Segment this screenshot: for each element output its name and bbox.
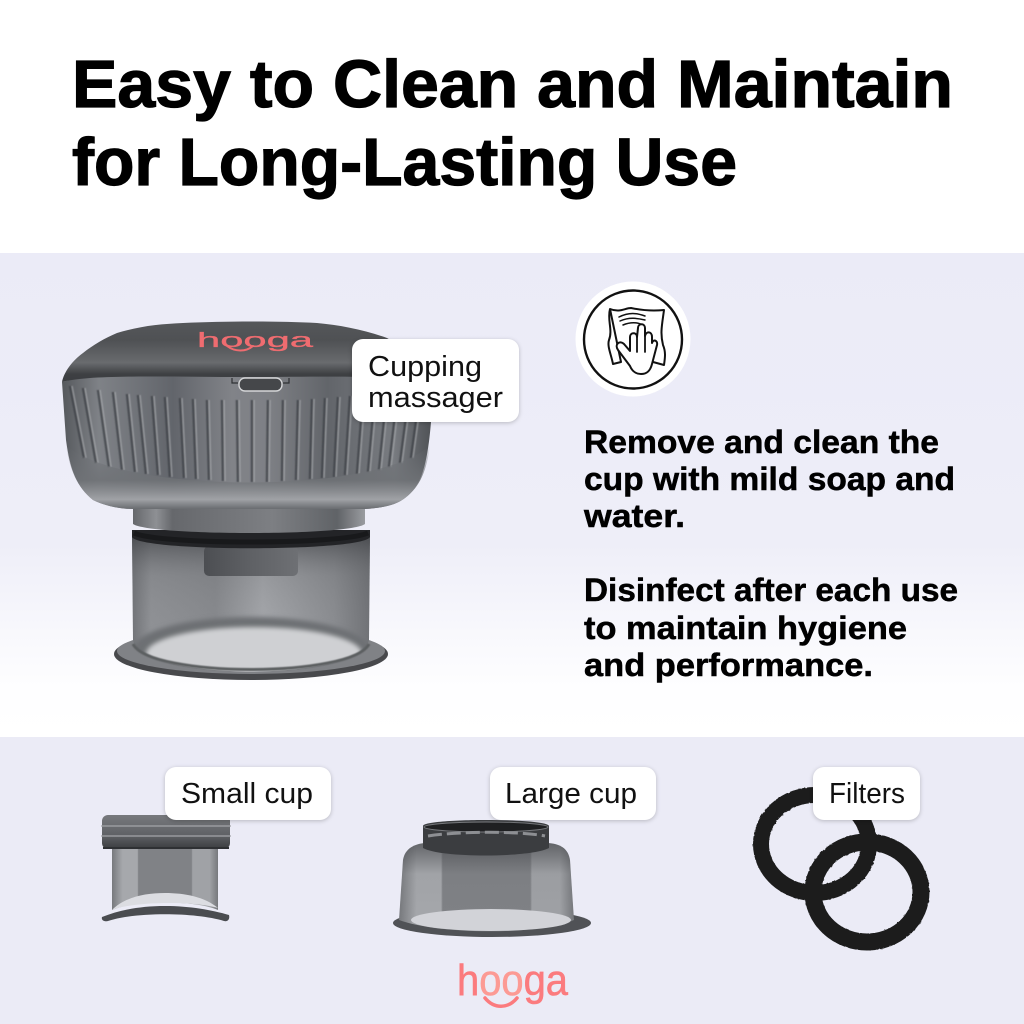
massager collar and seal [132,506,370,548]
icon: hand wiping with cloth [576,282,690,396]
massager ribbed body [62,372,431,509]
title: Easy to Clean and Maintain [72,47,953,122]
label: filters [813,767,920,820]
text: cleaning instructions: water. [583,498,685,534]
label: filters: Filters [829,778,905,810]
label: large cup [490,767,656,820]
text: disinfecting instructions: Disinfect after each use [584,572,958,608]
product: filters [761,795,921,942]
panel: accessories background [0,737,1024,1024]
label: small cup: Small cup [181,778,313,810]
text: cleaning instructions [583,424,955,534]
massager dark top cap [62,322,428,384]
wipe lines [619,314,645,325]
text: disinfecting instructions: and performance. [584,647,873,683]
panel: main product background [0,253,1024,737]
logo on massager: hooga [197,330,315,352]
label: cupping massager: Cupping [368,351,482,383]
logo on massager [197,330,315,352]
cloth [608,308,665,365]
title: for Long-Lasting Use [72,125,737,200]
massager base flange [114,628,388,680]
product: cupping massager [62,322,431,683]
label: large cup: Large cup [505,778,637,810]
USB-C port [232,378,289,391]
hand [617,324,657,374]
text: cleaning instructions: cup with mild soap and [584,461,955,497]
text: disinfecting instructions: to maintain hygiene [584,610,907,646]
product: large cup [393,820,591,937]
massager transparent cup [132,535,370,683]
text: cleaning instructions: Remove and clean the [584,424,939,460]
logo: hooga: hooga [457,956,568,1005]
text: disinfecting instructions [584,572,958,683]
label: small cup [165,767,331,820]
product: small cup [101,815,231,921]
title [72,47,953,200]
label: cupping massager: massager [368,382,503,414]
label: cupping massager [352,339,519,422]
